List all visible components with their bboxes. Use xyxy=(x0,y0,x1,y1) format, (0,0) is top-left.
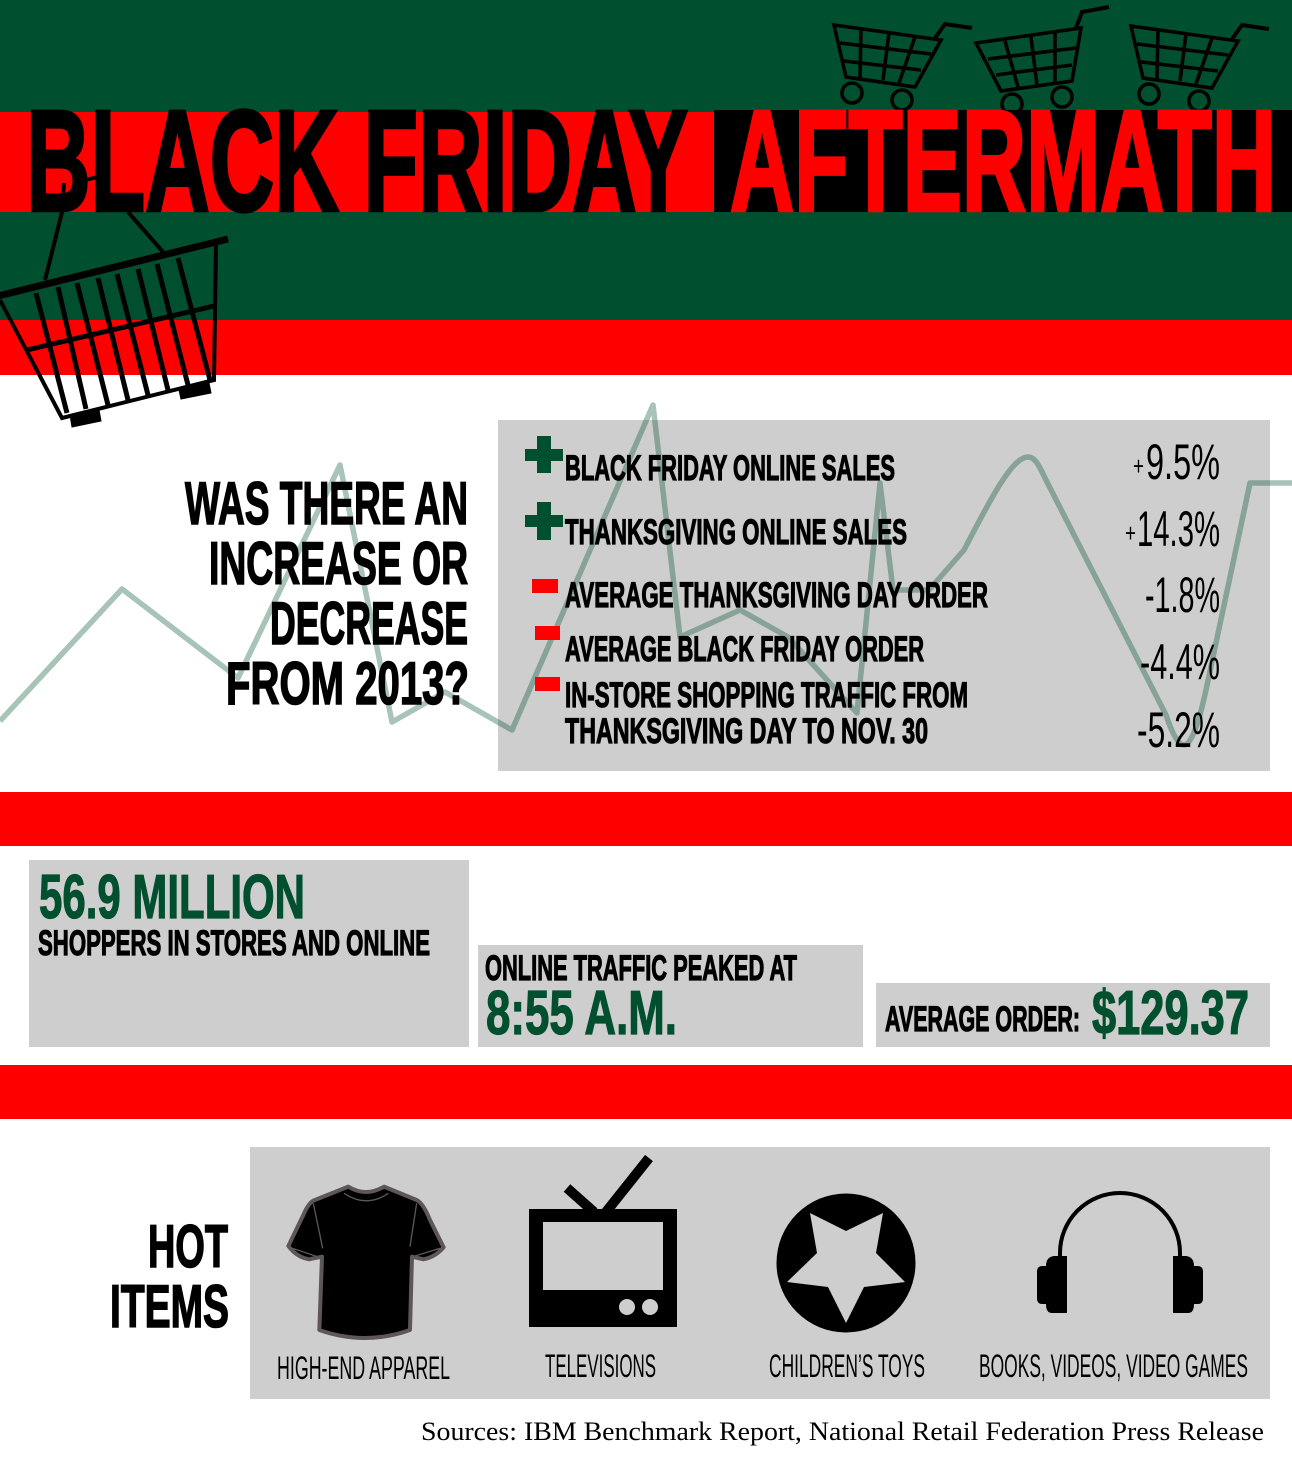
icon: television xyxy=(529,1158,677,1327)
stat row: average thanksgiving day order xyxy=(565,567,1220,623)
stat row: black friday online sales: + xyxy=(1133,451,1144,481)
panel: shoppers: SHOPPERS IN STORES AND ONLINE xyxy=(38,924,430,963)
header background bands xyxy=(0,0,1292,375)
panel: online traffic peak: 8:55 A.M. xyxy=(486,979,677,1048)
icon: plus 2 xyxy=(525,502,563,540)
stat row: average thanksgiving day order: AVERAGE THANKSGIVING DAY ORDER xyxy=(565,576,988,615)
icon: shopping basket xyxy=(0,177,228,427)
panel: shoppers xyxy=(29,860,469,1047)
icon: shopping cart 1 xyxy=(834,24,972,110)
line chart decoration xyxy=(0,405,1292,745)
stat row: in-store shopping traffic xyxy=(565,676,1220,758)
stat row: thanksgiving online sales: 14.3% xyxy=(1137,501,1220,557)
heading: was there an increase or decrease: INCREASE OR xyxy=(209,530,468,597)
stat row: thanksgiving online sales: + xyxy=(1125,518,1136,548)
stat row: thanksgiving online sales: THANKSGIVING ONLINE SALES xyxy=(565,513,907,552)
stat row: black friday online sales: BLACK FRIDAY ONLINE SALES xyxy=(565,449,895,488)
heading: was there an increase or decrease: DECREASE xyxy=(270,590,468,657)
stat row: in-store shopping traffic: -5.2% xyxy=(1137,702,1220,758)
item labels xyxy=(277,1348,1248,1386)
heading: was there an increase or decrease: WAS THERE AN xyxy=(185,470,468,537)
stat row: in-store shopping traffic: THANKSGIVING DAY TO NOV. 30 xyxy=(565,712,928,751)
icon: shopping cart 3 xyxy=(1131,25,1269,111)
heading: was there an increase or decrease xyxy=(185,470,469,717)
stat row: average black friday order: AVERAGE BLACK FRIDAY ORDER xyxy=(565,630,924,669)
sources: Sources: IBM Benchmark Report, National Retail Federation Press Release xyxy=(421,1417,1264,1446)
stat row: in-store shopping traffic: IN-STORE SHOPPING TRAFFIC FROM xyxy=(565,676,968,715)
icon: plus 1 xyxy=(525,436,563,473)
icon: minus 3 xyxy=(535,677,560,691)
icon: minus 2 xyxy=(535,626,560,640)
stat row: average black friday order: -4.4% xyxy=(1140,634,1220,690)
icon: shopping cart 2 xyxy=(976,7,1109,114)
item labels: TELEVISIONS xyxy=(545,1348,656,1384)
panel: average order: AVERAGE ORDER: xyxy=(885,1000,1080,1039)
stat row: black friday online sales xyxy=(565,434,1220,490)
stat row: average thanksgiving day order: -1.8% xyxy=(1145,567,1220,623)
title: BLACK FRIDAY xyxy=(26,80,688,242)
panel: hot items xyxy=(250,1147,1270,1399)
item labels: HIGH-END APPAREL xyxy=(277,1350,450,1386)
heading: hot items: ITEMS xyxy=(110,1273,229,1340)
panel: shoppers: 56.9 MILLION xyxy=(39,863,305,932)
icon: t-shirt xyxy=(288,1187,444,1338)
item labels: CHILDREN’S TOYS xyxy=(769,1348,925,1384)
stat row: average black friday order xyxy=(565,630,1220,690)
panel: online traffic peak: ONLINE TRAFFIC PEAKED AT xyxy=(485,949,797,988)
stat row: black friday online sales: 9.5% xyxy=(1146,434,1220,490)
panel: increase or decrease stats box xyxy=(498,420,1270,771)
icon: headphones xyxy=(1037,1193,1203,1313)
panel: average order xyxy=(876,979,1270,1048)
stat row: thanksgiving online sales xyxy=(565,501,1220,557)
heading: hot items: HOT xyxy=(148,1213,228,1280)
icon: star toy xyxy=(776,1194,916,1332)
heading: was there an increase or decrease: FROM 2013? xyxy=(226,650,469,717)
heading: hot items xyxy=(110,1213,229,1340)
icon: minus 1 xyxy=(532,579,558,593)
panel: online traffic peak xyxy=(478,945,863,1048)
divider band 2 xyxy=(0,1065,1292,1119)
divider band 1 xyxy=(0,792,1292,846)
